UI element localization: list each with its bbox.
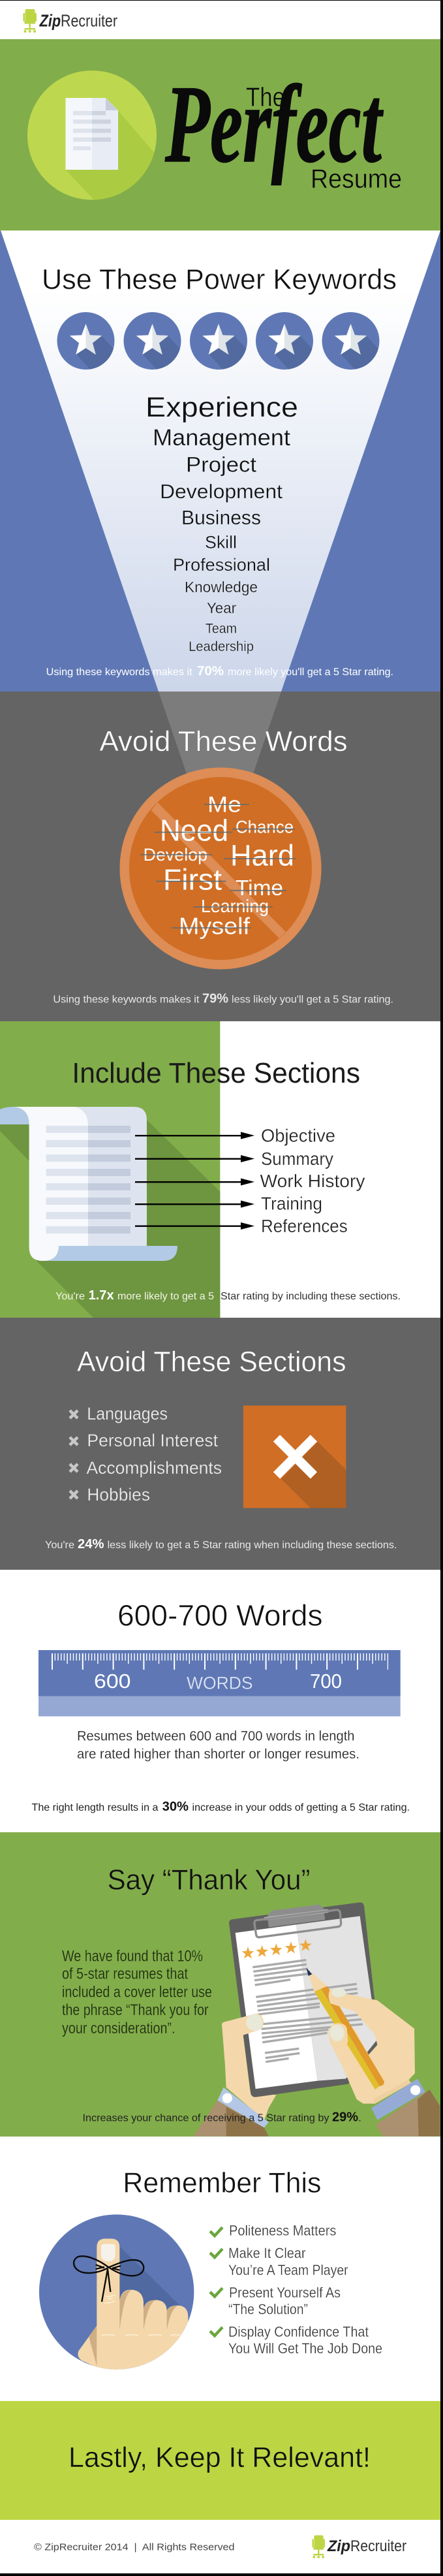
stat: 24%: 24% [78,1536,104,1551]
crossed-out words: Chance [236,818,294,837]
keyword list: Development [160,480,283,503]
checklist [210,2223,382,2357]
panel: avoid these words [0,692,440,1021]
panel: title banner [0,39,440,231]
icon: finger with string [39,2214,194,2376]
footer [34,2536,406,2558]
right cuff [371,2078,425,2120]
title text: The [246,82,285,112]
heading: Avoid These Sections [77,1346,346,1378]
section names: Work History [260,1171,365,1191]
stat: 30%: increase in your odds of getting a 5 Star rating. [192,1802,410,1813]
footer logo: Recruiter [350,2537,406,2555]
paragraph: the phrase “Thank you for [62,2001,209,2019]
clipboard clip [254,1905,341,1937]
keyword list: Knowledge [185,579,258,596]
panel: 600-700 words [0,1570,440,1832]
crossed-out words: Develop [144,845,207,865]
stat: 24% [45,1536,397,1551]
ruler: 700 [310,1670,342,1693]
keyword list: Skill [205,533,237,552]
ruler: 600 [94,1670,130,1693]
stat: 1.7x: more likely to get a 5 [117,1291,214,1302]
crossed-out words: Need [160,814,228,848]
stat: 24%: You're [45,1540,74,1551]
text lines [252,1960,363,2062]
crossed-out words [144,793,294,939]
icon: document in circle [27,71,157,200]
panel: include these sections [0,1021,440,1318]
footer logo [312,2536,406,2558]
panel: remember this [39,2172,382,2370]
keyword list: Leadership [189,639,254,654]
stat: 1.7x: 1.7x [89,1288,114,1303]
right hand palm [328,1990,415,2104]
ruler [38,1650,401,1716]
checklist: Display Confidence That [228,2324,369,2340]
checklist: Present Yourself As [229,2284,341,2300]
stat: 70%: 70% [197,663,224,678]
icon: paper scroll [0,1107,177,1261]
list of sections to avoid: Hobbies [87,1485,150,1504]
five star rating [57,312,380,370]
keyword list: Management [153,425,290,451]
keyword list [145,392,298,654]
stat: 70% [46,663,393,678]
heading: 600-700 Words [117,1598,323,1632]
stat: 79%: 79% [202,991,228,1006]
stat: 70%: more likely you'll get a 5 Star rating. [228,667,393,678]
stat: 79%: Using these keywords makes it [53,994,200,1006]
paragraph: We have found that 10% [62,1947,203,1965]
panel: closing banner [0,2401,440,2520]
paragraph [62,1947,212,2037]
stat: 29% [82,2109,361,2124]
left sleeve [194,2101,269,2137]
stat: 70%: Using these keywords makes it [46,667,192,678]
pencil [306,1967,384,2090]
right sleeve [376,2090,440,2137]
logo wordmark: Zip [39,11,61,31]
list of sections to avoid [70,1404,222,1504]
right fingertips [328,1988,357,2055]
keyword list: Professional [173,555,270,575]
stat: 1.7x [55,1288,401,1303]
body text: are rated higher than shorter or longer resumes. [77,1747,359,1762]
heading: Remember This [123,2167,321,2199]
crossed-out words: Me [207,793,241,818]
left cuff [217,2088,269,2127]
icon: orange card with X [243,1405,346,1508]
header logo [23,9,117,33]
stat: 29%: 29% [332,2109,358,2124]
stat: 29%: . [358,2112,361,2123]
checklist: Politeness Matters [229,2223,336,2239]
list of sections to avoid: Personal Interest [87,1431,218,1450]
five stars [242,1939,312,1958]
keyword list: Project [186,453,256,477]
stat: 79% [53,991,393,1006]
keyword list: Business [181,506,261,529]
stat: 29%: Increases your chance of receiving a 5 Star rating by [82,2112,329,2123]
checklist: Make It Clear [228,2245,306,2261]
copyright: © ZipRecruiter 2014 | All Rights Reserved [34,2541,235,2552]
checklist: “The Solution” [228,2301,308,2317]
section names: References [261,1216,348,1236]
clipboard board [229,1902,380,2097]
section names [260,1126,365,1236]
crossed-out words: Learning [201,896,269,916]
left thumb [222,2013,264,2037]
crossed-out words: Hard [230,838,294,872]
icon: office chair [23,9,37,33]
checklist: You Will Get The Job Done [228,2340,382,2357]
logo wordmark [39,11,117,31]
stat: 1.7x: You're [55,1291,85,1302]
stat: 1.7x: Star rating by including these sections. [221,1291,401,1302]
stat: 30%: 30% [162,1799,189,1814]
stat: 30%: The right length results in a [31,1802,159,1813]
panel: power keywords [0,231,440,692]
ruler: WORDS [187,1674,253,1693]
heading: Include These Sections [72,1057,360,1089]
icon: prohibition sign with words [120,768,321,969]
panel: avoid these sections [0,1318,440,1570]
crossed-out words: Myself [179,913,251,939]
title text: Resume [311,163,402,193]
heading: Avoid These Words [99,725,347,757]
closing text: Lastly, Keep It Relevant! [69,2441,371,2473]
illustration: hands, clipboard and pencil [194,1902,440,2137]
keyword list: Year [207,599,236,616]
section names: Objective [261,1126,335,1146]
body text: Resumes between 600 and 700 words in length [77,1729,355,1744]
logo wordmark: Recruiter [61,11,117,31]
crossed-out words: Time [236,876,283,900]
arrows [135,1132,254,1230]
keyword list: Experience [145,392,298,423]
paragraph: your consideration”. [62,2020,175,2037]
footer logo: Zip [327,2537,350,2555]
keyword list: Team [206,622,237,636]
heading: Say “Thank You” [108,1864,311,1896]
checklist: You’re A Team Player [228,2262,348,2278]
paper [236,1916,377,2089]
paragraph: of 5-star resumes that [62,1965,188,1983]
stat: 79%: less likely you'll get a 5 Star rating. [232,994,393,1006]
heading: Use These Power Keywords [42,264,397,295]
section names: Summary [261,1149,333,1169]
list of sections to avoid: Languages [87,1404,168,1423]
stat: 30% [31,1799,410,1814]
paragraph: included a cover letter use [62,1983,212,2001]
body text [77,1729,359,1762]
left palm [222,2024,276,2120]
list of sections to avoid: Accomplishments [86,1458,222,1478]
stat: 24%: less likely to get a 5 Star rating when including these sections. [108,1540,397,1551]
section names: Training [261,1194,322,1214]
panel: say thank you [0,1832,440,2137]
crossed-out words: First [163,863,222,897]
